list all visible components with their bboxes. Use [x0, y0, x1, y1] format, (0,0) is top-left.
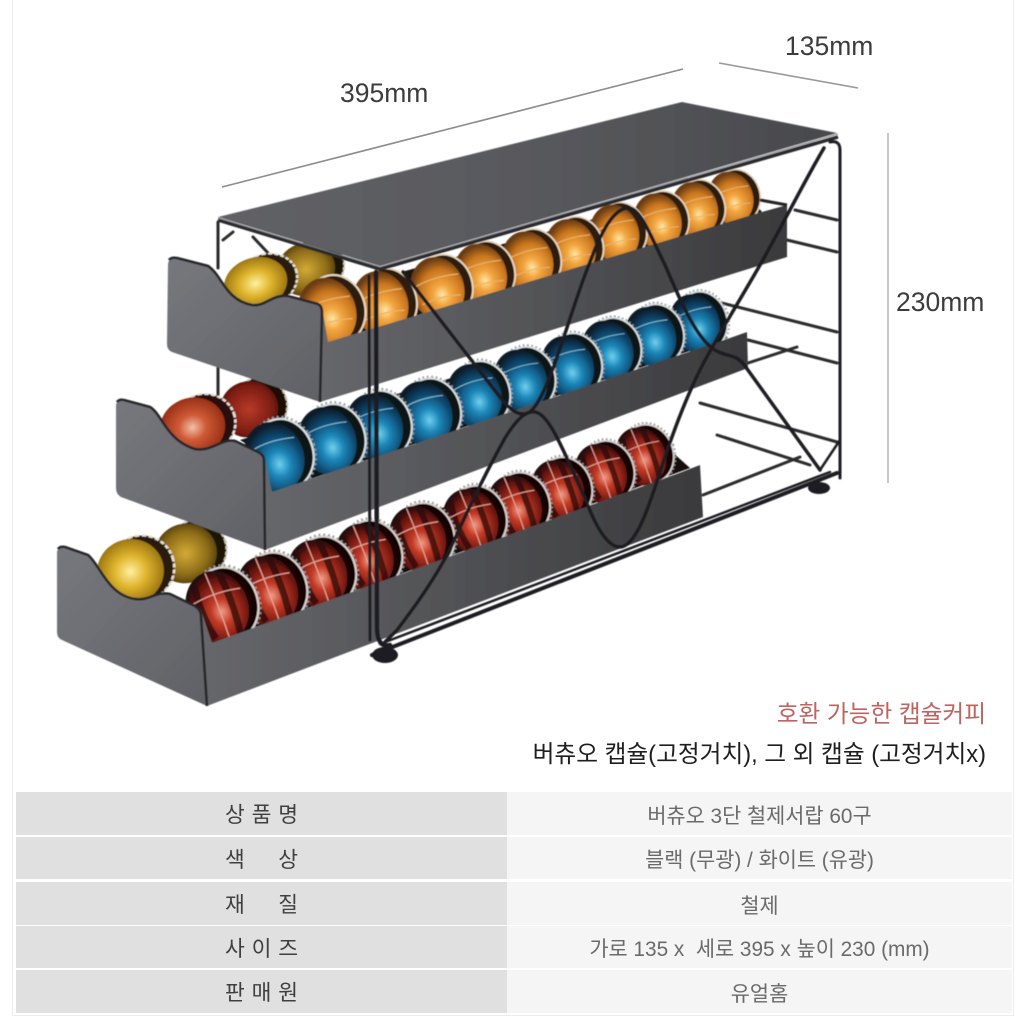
loose copper capsules: [152, 371, 295, 466]
wire frame: [369, 142, 840, 655]
product illustration: capsule drawer rack: [56, 62, 889, 707]
loose gold capsules: [88, 512, 234, 613]
compatible capsule heading: 호환 가능한 캡슐커피: [777, 702, 986, 728]
drawer front rail: [201, 465, 703, 706]
dimension label: 395mm: 395mm: [340, 78, 428, 108]
middle drawer: [116, 283, 748, 550]
spec table row: material: 재: [225, 893, 245, 917]
wave wire two: [403, 208, 820, 470]
top drawer: [167, 164, 787, 402]
spec table row: colour: [16, 837, 1012, 879]
spec table row: product name: 품: [252, 803, 271, 827]
orange capsule row: [290, 164, 767, 353]
drawer side panel: [57, 547, 207, 706]
wave wire one: [385, 148, 824, 642]
drawer front rail: [320, 205, 787, 402]
drawer interior: [240, 305, 728, 492]
loose gold capsules: [217, 232, 351, 318]
rear post: [830, 142, 840, 478]
drawer side panel: [167, 258, 322, 402]
spec table row: seller: 유얼홈: [731, 982, 788, 1006]
drawer interior: [300, 180, 762, 342]
dimension label: 230mm: 230mm: [896, 287, 984, 317]
back wire rails: [218, 210, 837, 495]
red capsule row: [175, 415, 684, 654]
spec table row: product name: [16, 792, 1012, 835]
top plate: [218, 102, 838, 269]
compatible capsule description: 버츄오 캡슐(고정거치), 그 외 캡슐 (고정거치x): [533, 742, 986, 768]
spec table row: product name: 버츄오 3단 철제서랍 60구: [647, 804, 872, 828]
front post: [376, 272, 390, 645]
spec table row: material: 질: [278, 893, 298, 917]
spec table row: seller: 판: [225, 981, 245, 1005]
spec table row: size: 이: [252, 936, 271, 960]
spec table row: colour: 상: [278, 848, 298, 872]
dimension line: depth: [719, 63, 858, 88]
spec table row: product name: 명: [278, 803, 298, 827]
spec table row: size: 가로 135 x 세로 395 x 높이 230 (mm): [589, 938, 930, 961]
drawer side panel: [116, 400, 265, 550]
spec table row: size: [16, 926, 1012, 968]
frame feet: [372, 482, 830, 663]
spec table row: colour: 색: [225, 848, 245, 872]
spec table row: seller: 매: [252, 981, 271, 1005]
spec table row: size: 즈: [278, 936, 298, 960]
spec table row: material: [16, 882, 1012, 925]
dimension line: height: [887, 133, 889, 483]
spec table row: seller: 원: [278, 981, 298, 1005]
spec table row: size: 사: [225, 936, 245, 960]
drawer front rail: [264, 332, 748, 550]
drawer interior: [190, 432, 690, 643]
base rail: [372, 473, 837, 655]
dimension line: width: [222, 69, 683, 187]
bottom drawer: [57, 415, 703, 706]
dimension label: 135mm: 135mm: [785, 31, 873, 61]
blue capsule row: [234, 283, 737, 502]
spec table row: seller: [16, 970, 1012, 1013]
spec table row: product name: 상: [225, 803, 245, 827]
spec table row: colour: 블랙 (무광) / 화이트 (유광): [645, 849, 874, 872]
spec table row: material: 철제: [740, 894, 779, 918]
